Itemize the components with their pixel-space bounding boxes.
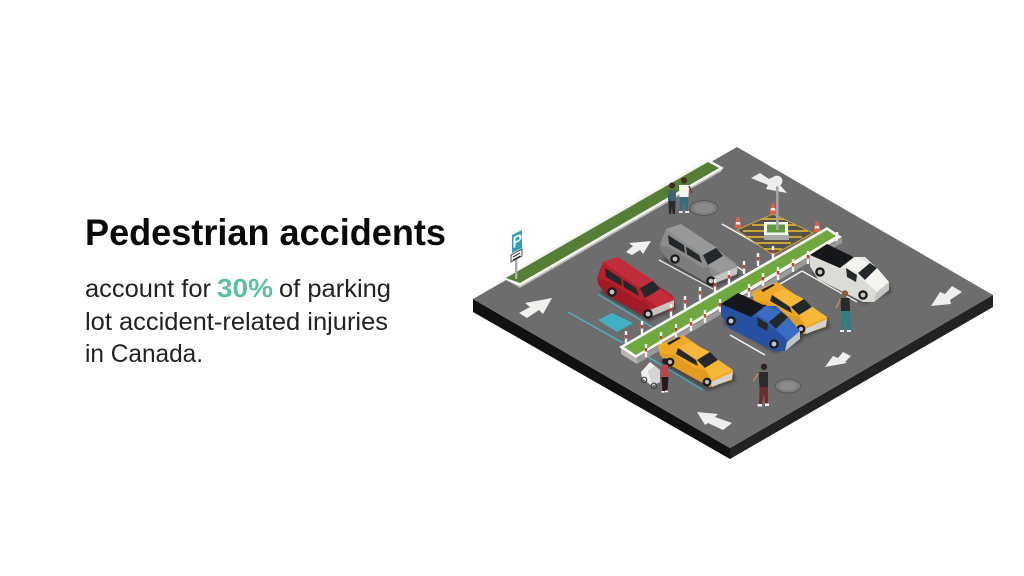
parking lines [659, 224, 857, 355]
car: blue pickup [721, 293, 803, 353]
person: man in white shirt [679, 177, 692, 213]
car: white pickup [810, 244, 892, 304]
car: grey SUV [660, 224, 740, 288]
text block: statistic: lot accident-related injuries [85, 308, 388, 336]
text block: statistic: account for [85, 275, 211, 303]
bollards: upper row [625, 232, 838, 344]
sign: parking [511, 230, 522, 279]
text block: statistic [85, 273, 391, 368]
accessible bay lines [568, 294, 703, 390]
car: yellow sedan [658, 335, 736, 391]
stroller [641, 362, 660, 389]
sign: parking: P [512, 231, 522, 252]
arrow: road marking left [519, 298, 552, 318]
manhole bottom [775, 379, 801, 393]
person: woman in blue top [668, 182, 676, 214]
car: red SUV [597, 257, 677, 321]
highlighted figure: 30%: 30% [217, 273, 273, 303]
person: woman with stroller [662, 358, 668, 393]
text block: statistic: in Canada. [85, 340, 203, 368]
cones [735, 203, 820, 232]
person: man in black vest [836, 290, 851, 332]
asphalt surface [473, 147, 993, 448]
accessible bay marker [598, 313, 633, 332]
green strip: top planter [501, 159, 724, 288]
hatched loading zone [737, 214, 813, 255]
arrow: road marking right [931, 286, 962, 306]
arrow: road marking bottom [697, 412, 732, 430]
arrow: road marking centre [626, 241, 651, 255]
title: Pedestrian accidents [85, 212, 446, 253]
median: green strip [619, 227, 842, 364]
platform side walls [473, 295, 993, 459]
text block: statistic: of parking [279, 275, 391, 303]
illustration: isometric parking lot [473, 147, 993, 459]
bollards: lower row [645, 251, 809, 357]
lamp planter [764, 222, 789, 240]
arrow: road marking top [751, 173, 787, 193]
lamp post [772, 176, 782, 230]
person: man in dark shirt [754, 364, 769, 406]
manhole top [690, 200, 718, 216]
car: orange sedan [752, 282, 830, 338]
arrow: road marking middle right [825, 352, 851, 367]
